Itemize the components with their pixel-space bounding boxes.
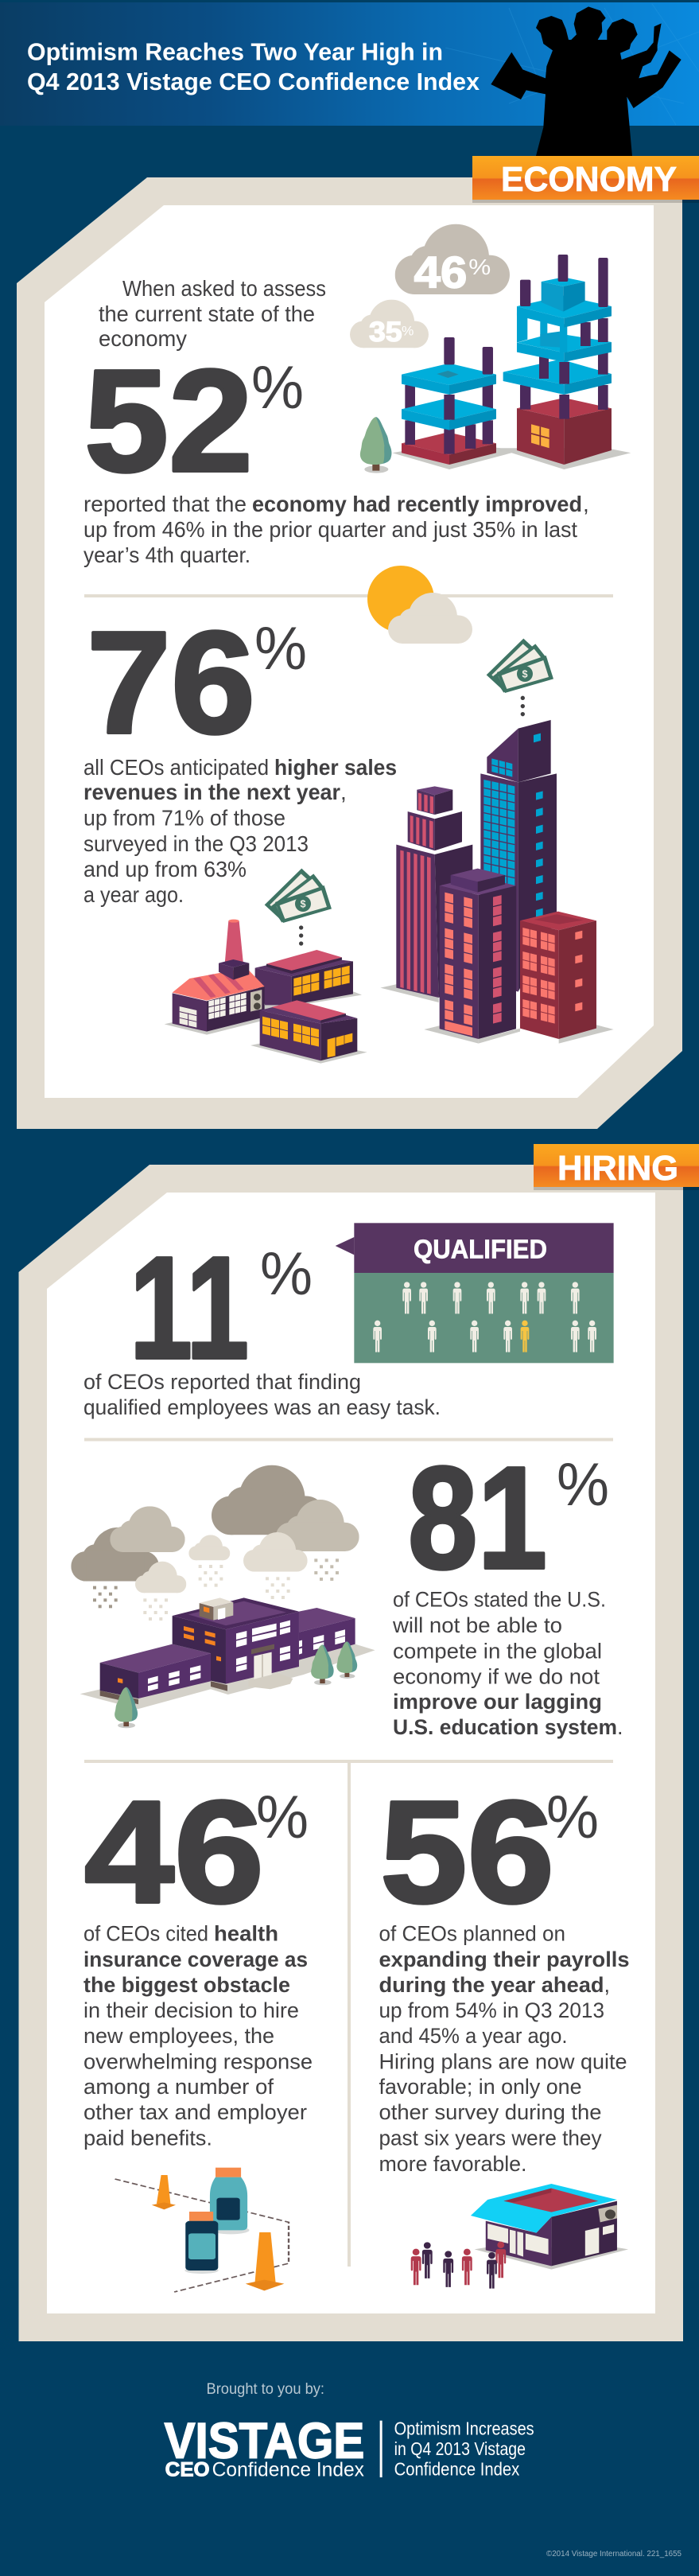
text: sales revenues [83, 755, 397, 907]
icon: small bottle [184, 2212, 219, 2274]
icon: medicine bottles and traffic cones [115, 2168, 289, 2292]
text: logo tagline: Confidence Index [394, 2459, 520, 2480]
icon: factory and money [165, 869, 367, 1064]
icon: stepped tower [396, 786, 472, 998]
icon: people queue [411, 2242, 506, 2289]
text: economy improved: , [583, 492, 589, 516]
stat: 46%: 46 [84, 1770, 264, 1933]
logo: vistage [165, 2413, 534, 2481]
icon: cloud 35%: % [402, 324, 414, 339]
icon: store [471, 2184, 628, 2270]
title [27, 38, 480, 95]
text: when asked: economy [99, 326, 187, 351]
panel: hiring [19, 1165, 683, 2341]
text: health insurance: in their decision to hire [83, 1998, 299, 2022]
text: health insurance: overwhelming response [83, 2049, 313, 2073]
icon: cloud 35% [350, 300, 429, 348]
text: expanding payrolls: past six years were they [379, 2126, 602, 2150]
tag: hiring: HIRING [557, 1149, 678, 1188]
panel: economy [17, 177, 682, 1129]
text: health insurance: insurance coverage as [83, 1948, 308, 1971]
icon: back workshop [255, 950, 353, 1005]
text: education system: economy if we do not [393, 1664, 600, 1688]
text: when asked [99, 276, 326, 351]
tag: economy: ECONOMY [501, 160, 677, 199]
text: when asked: When asked to assess [122, 276, 326, 301]
text: economy improved: economy had recently improved [252, 492, 582, 516]
text: education system: improve our lagging [393, 1690, 602, 1714]
text: expanding payrolls: more favorable. [379, 2152, 526, 2176]
text: sales revenues: and up from 63% [83, 857, 247, 881]
text: economy improved: up from 46% in the prior quarter and just 35% in last [83, 517, 577, 542]
tag: hiring [534, 1144, 699, 1190]
chart: qualified people pictogram [336, 1223, 614, 1363]
logo: vistage: VISTAGE [165, 2413, 364, 2469]
icon: cloud 46% [395, 224, 510, 298]
text: expanding payrolls: and 45% a year ago. [379, 2024, 568, 2048]
icon: silhouette of business people [491, 6, 682, 156]
stat: 76%: 76 [87, 601, 255, 764]
text: sales revenues: up from 71% of those [83, 805, 285, 831]
copyright: ©2014 Vistage International. 221_1655 [546, 2550, 682, 2558]
text: sales revenues: , [340, 780, 347, 804]
icon: store with people [411, 2184, 628, 2289]
stat: 81%: % [557, 1451, 609, 1519]
text: expanding payrolls: other survey during the [379, 2100, 601, 2124]
icon: factory with chimney [173, 920, 265, 1032]
text: education system: will not be able to [392, 1613, 562, 1637]
text: logo tagline: Optimism Increases [394, 2418, 534, 2439]
icon: tall blue-window tower [480, 720, 557, 992]
text: education system: . [617, 1715, 623, 1739]
icon: front purple building [440, 869, 516, 1039]
text: education system: compete in the global [393, 1639, 602, 1663]
text: health insurance: other tax and employer [83, 2100, 307, 2124]
text: sales revenues: higher sales [274, 755, 397, 780]
text: economy improved [83, 492, 589, 567]
text: logo tagline [394, 2418, 534, 2480]
icon: cloud 46%: % [468, 255, 491, 279]
logo: vistage: CEO [165, 2459, 210, 2481]
text: sales revenues: all CEOs anticipated [83, 755, 269, 780]
icon: trees [115, 1641, 357, 1728]
text: expanding payrolls: favorable; in only one [379, 2075, 582, 2099]
title: Q4 2013 Vistage CEO Confidence Index [27, 68, 480, 95]
text: education system: U.S. education system [393, 1715, 617, 1739]
stat: 11%: % [260, 1240, 313, 1308]
text: health insurance: among a number of [83, 2075, 274, 2099]
icon: tree [360, 417, 391, 473]
text: expanding payrolls [379, 1922, 630, 2176]
icon: large bottle [210, 2168, 249, 2234]
text: expanding payrolls: during the year ahead [379, 1973, 604, 1997]
text: when asked: the current state of the [99, 302, 315, 326]
text: health insurance: new employees, the [83, 2024, 274, 2048]
tag: economy [472, 156, 699, 203]
text: sales revenues: revenues in the next year [83, 780, 340, 804]
stat: 52%: 52 [84, 339, 253, 502]
text: expanding payrolls: expanding their payrolls [379, 1948, 630, 1971]
logo: vistage: Confidence Index [212, 2459, 364, 2481]
heading: qualified: QUALIFIED [414, 1235, 547, 1265]
text: qualified employees: qualified employees was an easy task. [83, 1395, 441, 1419]
icon: money: $ [300, 898, 306, 909]
text: expanding payrolls: , [604, 1973, 610, 1997]
icon: large cone [246, 2232, 284, 2290]
text: expanding payrolls: Hiring plans are now quite [379, 2049, 627, 2073]
icon: money: $ [522, 668, 528, 679]
text: expanding payrolls: up from 54% in Q3 2013 [379, 1998, 604, 2022]
text: health insurance: health [214, 1922, 278, 1946]
icon: sun and cloud [367, 566, 472, 644]
icon: left building frame [392, 337, 631, 469]
icon: money [265, 869, 332, 946]
footer: brought to you by: Brought to you by: [207, 2381, 324, 2398]
text: logo tagline: in Q4 2013 Vistage [394, 2438, 526, 2459]
text: health insurance [83, 1922, 313, 2150]
text: health insurance: the biggest obstacle [83, 1973, 290, 1997]
text: economy improved: year’s 4th quarter. [83, 543, 250, 567]
stat: 46%: % [256, 1784, 309, 1851]
stat: 11%: 11 [130, 1226, 249, 1389]
stat: 52%: % [251, 354, 304, 422]
text: expanding payrolls: of CEOs planned on [379, 1922, 565, 1946]
stat: 76%: % [254, 615, 307, 683]
icon: money [487, 639, 553, 716]
header banner [0, 2, 699, 126]
icon: small cone [152, 2175, 176, 2209]
people grid [373, 1282, 596, 1352]
icon: right building frame [503, 255, 612, 465]
icon: clouds and rain [71, 1465, 359, 1621]
icon: school building [80, 1597, 375, 1709]
text: health insurance: paid benefits. [83, 2126, 212, 2150]
icon: cloud 46%: 46 [414, 247, 467, 298]
text: health insurance: of CEOs cited [83, 1922, 208, 1946]
text: education system: of CEOs stated the U.S. [393, 1588, 606, 1612]
stat: 56%: % [546, 1784, 599, 1851]
text: economy improved: reported that the [83, 492, 247, 516]
text: qualified employees [83, 1370, 441, 1419]
stat: 81%: 81 [408, 1436, 547, 1599]
icon: clouds and buildings under construction [350, 224, 631, 473]
text: education system [392, 1588, 623, 1739]
text: qualified employees: of CEOs reported that finding [83, 1370, 361, 1394]
icon: front workshop [260, 1000, 357, 1060]
icon: front red building [520, 912, 596, 1039]
icon: skyscrapers and money [380, 639, 614, 1044]
text: sales revenues: surveyed in the Q3 2013 [83, 831, 309, 856]
title: Optimism Reaches Two Year High in [27, 38, 443, 65]
text: sales revenues: a year ago. [83, 882, 184, 907]
icon: cloud 35%: 35 [369, 317, 402, 348]
stat: 56%: 56 [380, 1770, 554, 1933]
icon: school under storm clouds [71, 1465, 375, 1728]
